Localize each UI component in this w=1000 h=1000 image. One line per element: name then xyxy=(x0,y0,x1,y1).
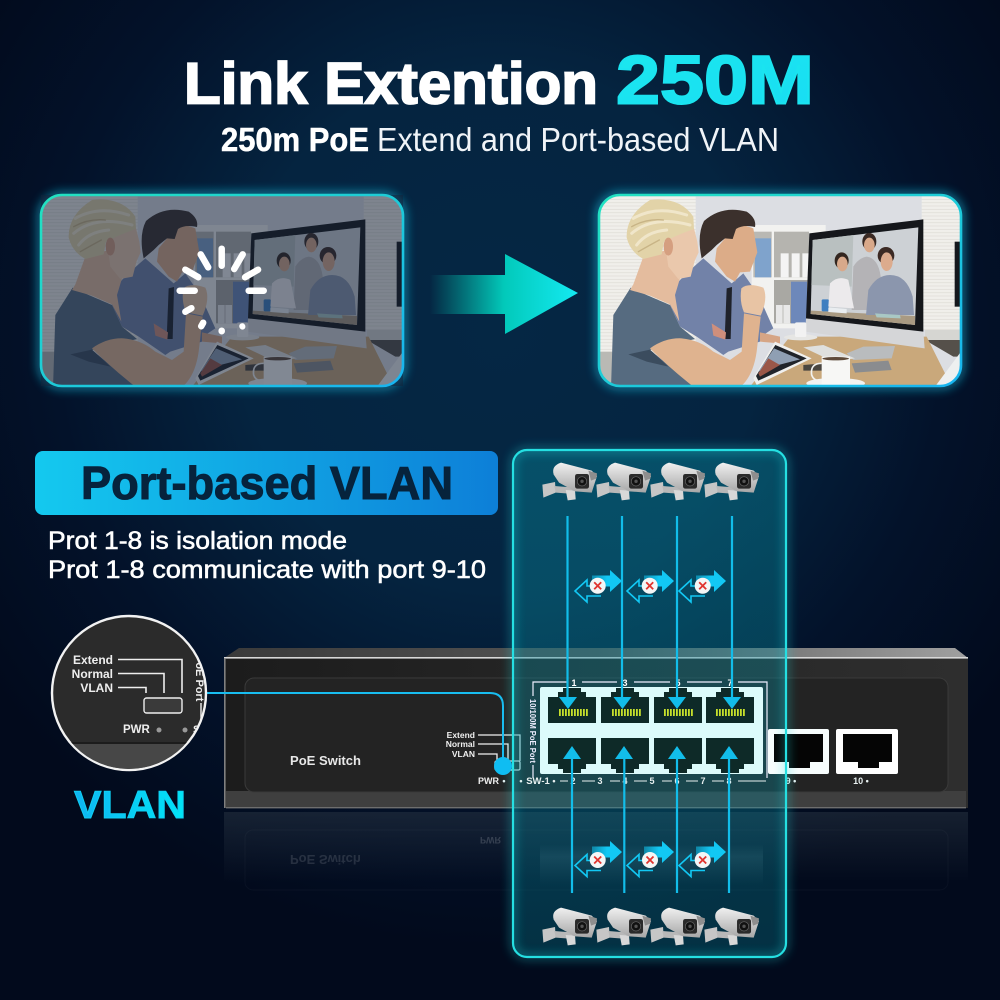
ports 9 and 10 xyxy=(768,729,898,774)
port numbers row xyxy=(502,776,869,787)
subtitle: 250m PoE xyxy=(221,121,369,158)
port numbers row: 5 xyxy=(649,776,655,786)
port block 1-8: 5 xyxy=(675,678,681,688)
mode selector labels xyxy=(446,730,499,786)
mode selector labels: VLAN xyxy=(452,749,475,759)
icons: top security cameras xyxy=(542,463,759,500)
port block 1-8: 7 xyxy=(727,678,733,688)
port numbers row: 10 • xyxy=(853,776,869,786)
selector wiring xyxy=(478,735,520,770)
port block 1-8: 3 xyxy=(622,678,628,688)
title xyxy=(184,42,814,118)
port numbers row: SW-1 xyxy=(526,776,550,787)
panel: VLAN highlight region xyxy=(513,450,786,957)
magnifier: selector switch detail: VLAN xyxy=(80,681,113,695)
isolation markers top xyxy=(575,570,726,602)
text block: VLAN description: Prot 1-8 is isolation mode xyxy=(48,527,347,555)
heading: Port-based VLAN xyxy=(35,451,498,515)
port numbers row: 8 xyxy=(726,776,732,786)
text block: VLAN description xyxy=(48,527,486,584)
magnifier: selector switch detail: Normal xyxy=(72,667,113,681)
reflection under switch: PWR xyxy=(480,835,501,845)
label: VLAN: VLAN xyxy=(74,784,186,827)
port numbers row: 3 xyxy=(597,776,603,786)
reflection under switch: PoE Switch xyxy=(290,852,361,867)
subtitle: Extend and Port-based VLAN xyxy=(377,121,779,158)
LED contacts xyxy=(559,709,745,716)
port numbers row: 7 xyxy=(700,776,706,786)
magnifier: selector switch detail: PWR xyxy=(123,724,151,736)
label: PoE Switch: PoE Switch xyxy=(290,753,361,768)
arrow: before to after xyxy=(430,254,578,334)
port numbers row: • xyxy=(502,776,506,786)
port numbers row: • xyxy=(519,776,523,786)
port numbers row: 4 xyxy=(622,776,628,786)
panel: after, clear video call xyxy=(599,195,961,389)
heading: Port-based VLAN: Port-based VLAN xyxy=(81,457,453,509)
magnifier: selector switch detail xyxy=(50,616,210,773)
magnifier: selector switch detail: S xyxy=(193,724,200,736)
photo: clear video conference xyxy=(600,196,960,385)
icon: loading spinner xyxy=(180,249,264,331)
connector: VLAN switch to magnifier xyxy=(205,693,512,775)
bottom data lines with arrows xyxy=(563,746,738,893)
port numbers row: • xyxy=(552,776,556,786)
photo: dimmed video conference xyxy=(41,195,403,386)
icons: bottom security cameras xyxy=(542,908,759,945)
magnifier: selector switch detail: Extend xyxy=(73,653,113,667)
frame: VLAN highlight region xyxy=(513,450,786,957)
top data lines with arrows xyxy=(559,516,741,709)
reflection under switch xyxy=(224,812,968,890)
RJ45 ports top row xyxy=(548,688,754,723)
port numbers row: 9 • xyxy=(786,776,796,786)
port numbers row: 2 xyxy=(570,776,576,786)
port block 1-8: 1 xyxy=(571,678,577,688)
title: Link Extention xyxy=(184,52,598,116)
title: 250M xyxy=(616,42,814,118)
subtitle xyxy=(221,121,779,158)
mode selector labels: PWR xyxy=(478,776,499,786)
isolation markers bottom xyxy=(575,841,726,876)
port block 1-8 xyxy=(502,678,869,787)
text block: VLAN description: Prot 1-8 communicate with port 9-10 xyxy=(48,556,486,584)
port numbers row: 6 xyxy=(674,776,680,786)
magnifier: selector switch detail: PoE Port xyxy=(193,655,205,702)
panel: before, buffering video call xyxy=(41,195,403,389)
network switch body xyxy=(224,648,968,808)
mode selector labels: Extend xyxy=(447,730,475,740)
RJ45 ports bottom row xyxy=(548,738,754,773)
mode selector labels: Normal xyxy=(446,739,475,749)
label: 10/100M PoE Port: 10/100M PoE Port xyxy=(528,699,538,763)
